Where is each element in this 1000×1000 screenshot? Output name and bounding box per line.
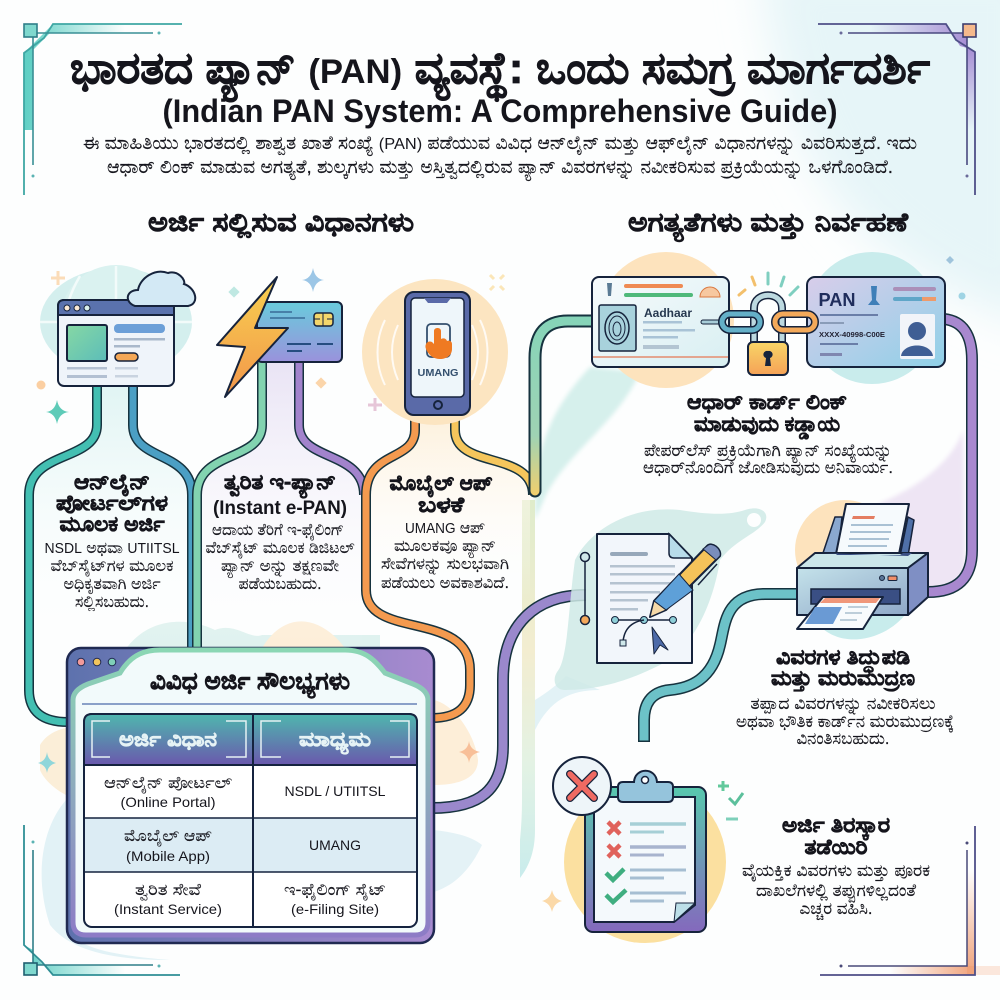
card text: mobile app: UMANG ಆಪ್ (405, 519, 485, 537)
card text: mobile app: ಪಡೆಯಲು ಅವಕಾಶವಿದೆ. (381, 574, 509, 592)
connector: teal printer to document (644, 594, 798, 736)
heading: needs and maintenance: ಅಗತ್ಯತೆಗಳು ಮತ್ತು ನಿರ್ವಹಣೆ (628, 207, 909, 242)
card text: online portal: ವೆಬ್‌ಸೈಟ್‌ಗಳ ಮೂಲಕ (50, 557, 174, 576)
text: avoid application rejection: ದಾಖಲೆಗಳಲ್ಲಿ ತಪ್ಪುಗಳಿಲ್ಲದಂತೆ (756, 881, 916, 903)
table row text: (e-Filing Site) (291, 901, 379, 917)
text: corrections and reprint: ವಿನಂತಿಸಬಹುದು. (796, 729, 890, 748)
panel: application options table (67, 648, 434, 943)
connector: green e-PAN line (197, 360, 262, 650)
table row text: ತ್ವರಿತ ಸೇವೆ (135, 881, 201, 900)
PAN card: XXXX-40998-C00E (819, 330, 885, 339)
table title: ವಿವಿಧ ಅರ್ಜಿ ಸೌಲಭ್ಯಗಳು (150, 668, 350, 699)
table row text (104, 774, 386, 917)
text: Aadhaar link required: ಆಧಾರ್ ಕಾರ್ಡ್ ಲಿಂಕ್ (687, 391, 847, 414)
card text: mobile app: ಸೇವೆಗಳನ್ನು ಸುಲಭವಾಗಿ (381, 555, 509, 575)
table window frame (67, 648, 434, 943)
text: Aadhaar link required: ಆಧಾರ್‌ನೊಂದಿಗೆ ಜೋಡಿಸುವುದು ಅನಿವಾರ್ಯ. (643, 458, 893, 477)
intro text (83, 132, 917, 181)
icon: online portal browser (40, 265, 195, 386)
window dots (77, 658, 116, 666)
table header text (119, 729, 371, 755)
text: Aadhaar link required (643, 391, 893, 477)
card text: instant e-PAN: ಆದಾಯ ತೆರಿಗೆ ಇ-ಫೈಲಿಂಗ್ (212, 521, 344, 540)
text: avoid application rejection: ಎಚ್ಚರ ವಹಿಸಿ. (800, 899, 872, 920)
card text: instant e-PAN (206, 471, 355, 593)
card text: online portal: NSDL ಅಥವಾ UTIITSL (44, 539, 180, 557)
card background fills (30, 355, 530, 650)
icon: rejection checklist clipboard (542, 757, 743, 943)
intro text: ಆಧಾರ್ ಲಿಂಕ್ ಮಾಡುವ ಅಗತ್ಯತೆ, ಶುಲ್ಕಗಳು ಮತ್ತು ಅಸ್ತಿತ್ವದಲ್ಲಿರುವ ಪ್ಯಾನ್ ವಿವರಗಳನ್ನು ನವೀಕರಿಸುವ ಪ್ರಕ್ರಿಯೆಯನ್ನು ಒಳಗೊಂಡಿದೆ. (107, 156, 893, 181)
card text: online portal: ಅಧಿಕೃತವಾಗಿ ಅರ್ಜಿ (64, 575, 161, 594)
text: corrections and reprint: ಮತ್ತು ಮರುಮುದ್ರಣ (771, 667, 915, 692)
text: avoid application rejection (742, 814, 930, 920)
chain and padlock (703, 295, 815, 343)
connector: blue online portal line (133, 385, 192, 650)
card text: instant e-PAN: ತ್ವರಿತ ಇ-ಪ್ಯಾನ್ (224, 471, 336, 499)
card text: online portal: ಸಲ್ಲಿಸಬಹುದು. (75, 593, 149, 612)
connector: purple table to document (432, 595, 586, 808)
PAN card: PAN (818, 290, 856, 310)
frame corner: top right (818, 24, 976, 195)
table row text: ಮೊಬೈಲ್ ಆಪ್ (124, 827, 212, 846)
frame corner: top left (24, 24, 182, 195)
text: corrections and reprint: ಅಥವಾ ಭೌತಿಕ ಕಾರ್ಡ್‌ನ ಮರುಮುದ್ರಣಕ್ಕೆ (736, 712, 954, 732)
text: Aadhaar link required: ಮಾಡುವುದು ಕಡ್ಡಾಯ (694, 413, 840, 439)
card text: instant e-PAN: ಪ್ಯಾನ್ ಅನ್ನು ತಕ್ಷಣವೇ (221, 557, 339, 578)
icon: UMANG phone: UMANG (418, 367, 458, 379)
card text: online portal: ಮೂಲಕ ಅರ್ಜಿ (60, 513, 165, 536)
subtitle: (Indian PAN System: A Comprehensive Guide) (162, 93, 838, 129)
table row text: ಇ-ಫೈಲಿಂಗ್ ಸೈಟ್ (284, 881, 386, 900)
table header text: ಮಾಧ್ಯಮ (299, 729, 371, 755)
table rows (84, 714, 417, 927)
table row text: UMANG (309, 837, 361, 853)
connector: teal online portal line (29, 385, 97, 722)
text: corrections and reprint (736, 646, 954, 748)
frame corner: bottom left (24, 825, 180, 975)
PAN card (807, 277, 945, 367)
text: corrections and reprint: ವಿವರಗಳ ತಿದ್ದುಪಡಿ (776, 646, 910, 672)
card text: online portal: ಆನ್‌ಲೈನ್ (74, 471, 150, 497)
table window inner (73, 650, 428, 935)
text: Aadhaar link required: ಪೇಪರ್‌ಲೆಸ್ ಪ್ರಕ್ರಿಯೆಗಾಗಿ ಪ್ಯಾನ್ ಸಂಖ್ಯೆಯನ್ನು (644, 441, 892, 463)
card text: instant e-PAN: (Instant e-PAN) (213, 498, 347, 519)
text: avoid application rejection: ತಡೆಯಿರಿ (804, 836, 868, 859)
text: avoid application rejection: ವೈಯಕ್ತಿಕ ವಿವರಗಳು ಮತ್ತು ಪೂರಕ (742, 861, 930, 882)
connector: yellow mobile line (455, 413, 533, 495)
decorative icons: sparkles (36, 268, 504, 773)
link rays (739, 273, 798, 295)
card text: instant e-PAN: ವೆಬ್‌ಸೈಟ್ ಮೂಲಕ ಡಿಜಿಟಲ್ (206, 539, 355, 558)
Aadhaar card (592, 277, 729, 367)
card text: mobile app: ಮೂಲಕವೂ ಪ್ಯಾನ್ (394, 537, 496, 558)
Aadhaar card: Aadhaar (644, 306, 692, 320)
table row text: (Mobile App) (126, 848, 210, 864)
card text: mobile app: ಮೊಬೈಲ್ ಆಪ್ (390, 472, 493, 498)
table header text: ಅರ್ಜಿ ವಿಧಾನ (119, 729, 217, 751)
card text: mobile app (381, 472, 509, 592)
table row text: (Online Portal) (120, 794, 216, 810)
text: corrections and reprint: ತಪ್ಪಾದ ವಿವರಗಳನ್ನು ನವೀಕರಿಸಲು (750, 694, 936, 715)
card text: online portal: ಪೋರ್ಟಲ್‌ಗಳ (56, 492, 168, 515)
text: avoid application rejection: ಅರ್ಜಿ ತಿರಸ್ಕಾರ (782, 814, 890, 840)
icon: instant e-PAN card and bolt (217, 277, 342, 397)
title: ಭಾರತದ ಪ್ಯಾನ್ (PAN) ವ್ಯವಸ್ಥೆ: ಒಂದು ಸಮಗ್ರ ಮಾರ್ಗದರ್ಶಿ (70, 44, 930, 103)
connector: green Aadhaar line (535, 321, 594, 491)
heading: application methods: ಅರ್ಜಿ ಸಲ್ಲಿಸುವ ವಿಧಾನಗಳು (148, 207, 414, 239)
table row text: NSDL / UTIITSL (284, 783, 386, 799)
connector: purple PAN line (910, 319, 972, 592)
icon: UMANG phone (362, 279, 508, 425)
connector: orange mobile line (366, 413, 470, 718)
icon: Aadhaar PAN link (592, 252, 966, 388)
card text: online portal (44, 471, 180, 612)
icon: printer (795, 500, 928, 639)
table row text: (Instant Service) (114, 901, 222, 917)
intro text: ಈ ಮಾಹಿತಿಯು ಭಾರತದಲ್ಲಿ ಶಾಶ್ವತ ಖಾತೆ ಸಂಖ್ಯೆ (PAN) ಪಡೆಯುವ ವಿವಿಧ ಆನ್‌ಲೈನ್ ಮತ್ತು ಆಫ್‌ಲೈನ್ ವಿಧಾನಗಳನ್ನು ವಿವರಿಸುತ್ತದೆ. ಇದು (83, 132, 917, 157)
card text: mobile app: ಬಳಕೆ (418, 494, 465, 517)
table row text: ಆನ್‌ಲೈನ್ ಪೋರ್ಟಲ್ (104, 774, 232, 793)
frame corner: bottom right (820, 826, 1000, 975)
connector: purple e-PAN line (299, 360, 364, 495)
icon: document editing (555, 508, 766, 690)
card text: instant e-PAN: ಪಡೆಯಬಹುದು. (238, 575, 322, 593)
